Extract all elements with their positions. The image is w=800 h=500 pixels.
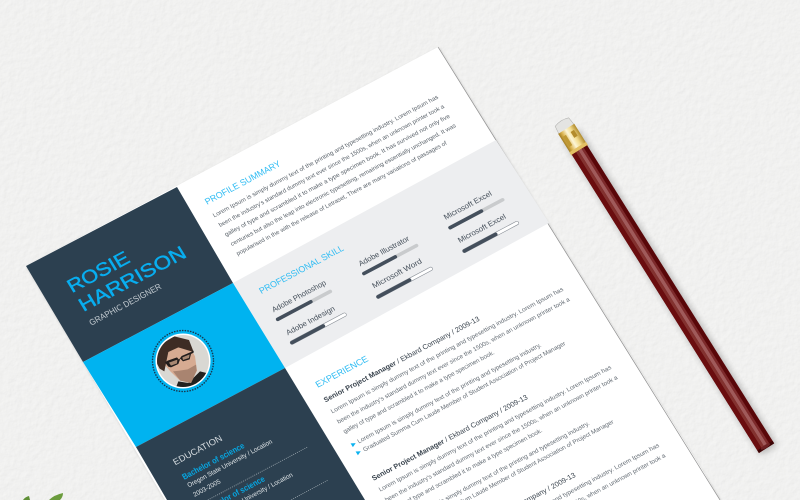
pencil eraser xyxy=(554,116,574,134)
experience entry 2: Senior Project Manager / Ekbard Company / 2009-13 xyxy=(370,393,529,483)
profile summary: centuries but also the leap into electronic typesetting, remaining essentially unchanged. It was xyxy=(230,123,457,248)
pencil ferrule xyxy=(558,124,588,156)
experience entry 2: been the industry's standard dummy text ever since the 1500s, when an unknown printer took a xyxy=(384,374,620,500)
professional skill heading: PROFESSIONAL SKILL xyxy=(257,243,345,296)
profile summary: galley of type and scrambled it to make a type specimen book. It has survived not only five xyxy=(224,113,452,238)
skill: Microsoft Excel second: Microsoft Excel xyxy=(456,212,508,245)
panel: sidebar photo block xyxy=(83,283,285,447)
experience entry 1 xyxy=(322,273,591,457)
skill: Microsoft Excel xyxy=(440,185,505,230)
resume sheet shadow xyxy=(27,48,721,500)
skill: Adobe Illustrator xyxy=(355,232,419,276)
experience entry 3 xyxy=(418,429,668,500)
education section: EDUCATION xyxy=(171,433,224,467)
education section: Oregon State University / Location xyxy=(186,438,274,489)
experience entry 1: been the industry's standard dummy text ever since the 1500s, when an unknown printer took a xyxy=(336,296,572,425)
profile summary xyxy=(203,79,464,257)
experience entry 2: Lorem Ipsum is simply dummy text of the printing and typesetting industry. Lorem Ipsum has xyxy=(378,364,613,493)
profile summary: popularised in the with the release of Letraset, There are many variations of passages of xyxy=(236,141,449,257)
resume sheet xyxy=(26,47,720,500)
name and job title: GRAPHIC DESIGNER xyxy=(87,281,163,327)
panel: sidebar education block xyxy=(136,368,365,500)
paper-aligned content xyxy=(56,76,668,500)
profile summary: PROFILE SUMMARY xyxy=(203,159,282,207)
experience heading: EXPERIENCE xyxy=(314,354,370,390)
skill: Microsoft Excel: Microsoft Excel xyxy=(442,189,494,222)
skill: Microsoft Excel second xyxy=(454,208,519,253)
profile summary: been the industry's standard dummy text ever since the 1500s, when an unknown printer took a xyxy=(218,104,446,229)
pencil shadow xyxy=(563,130,777,455)
skill: Adobe Indesign xyxy=(282,301,347,345)
skill: Microsoft Word xyxy=(368,254,433,299)
education section xyxy=(168,401,329,500)
experience entry 1: galley of type and scrambled it to make a type specimen book. xyxy=(342,349,496,435)
icon: pencil xyxy=(553,116,775,453)
profile summary: Lorem Ipsum is simply dummy text of the printing and typesetting industry. Lorem Ipsum has xyxy=(212,95,440,219)
leaves at bottom left xyxy=(23,493,63,500)
name and job title xyxy=(63,224,197,327)
skill: Adobe Illustrator: Adobe Illustrator xyxy=(357,234,411,268)
pencil body xyxy=(572,145,774,453)
experience entry 1: Lorem Ipsum is simply dummy text of the printing and typesetting industry. Lorem Ipsum has xyxy=(330,286,565,415)
experience entry 1: Graduated Summa Cum Laude Member of Student Association of Project Manager xyxy=(362,340,567,453)
experience entry 1: Senior Project Manager / Ekbard Company / 2009-13 xyxy=(322,314,481,404)
photo: circular portrait xyxy=(152,330,214,398)
skill: Microsoft Word: Microsoft Word xyxy=(370,257,424,290)
skill: Adobe Photoshop: Adobe Photoshop xyxy=(270,278,328,314)
education section: 2003-2005 xyxy=(192,478,222,499)
name and job title: HARRISON xyxy=(75,243,190,316)
skill: Adobe Indesign: Adobe Indesign xyxy=(284,304,337,337)
panel: sidebar name block xyxy=(26,187,233,362)
education section: Bachelor of science xyxy=(180,440,247,482)
panel: skills band background xyxy=(233,140,549,368)
name and job title: ROSIE xyxy=(64,248,134,297)
experience entry 1: Lorem Ipsum is simply dummy text of the printing and typesetting industry. xyxy=(356,342,543,445)
